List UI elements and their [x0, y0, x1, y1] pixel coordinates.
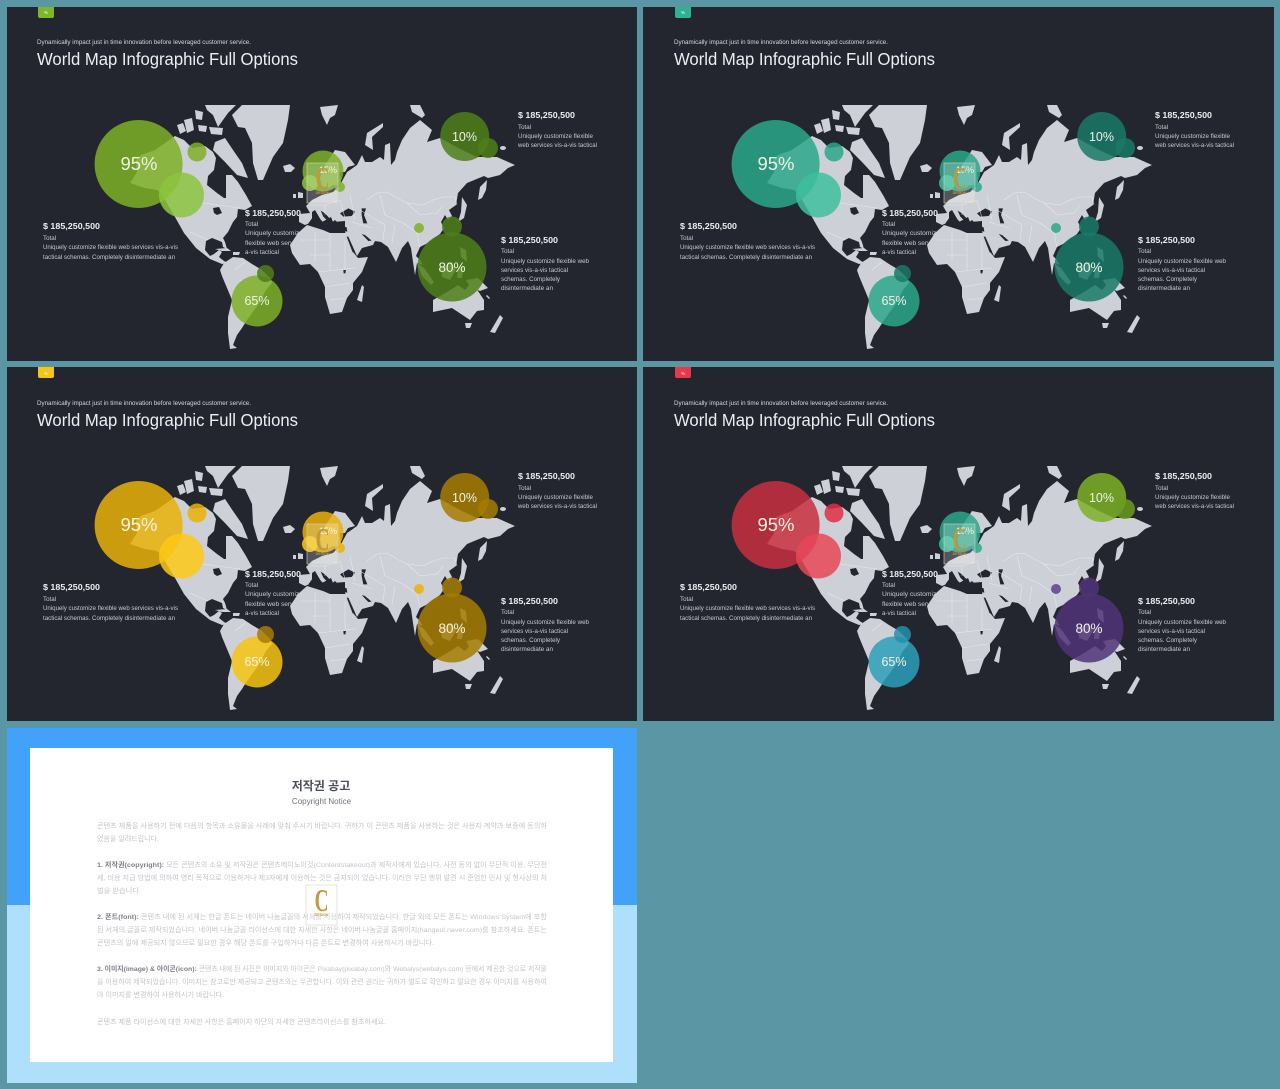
badge: % [44, 10, 48, 15]
text block: lower right: disintermediate an [501, 285, 554, 292]
percent labels: 15% [319, 526, 337, 536]
text block: left [43, 221, 178, 261]
text block: top right: Uniquely customize flexible [1155, 133, 1231, 140]
text block: lower right: $ 185,250,500 [501, 235, 558, 245]
text block: lower right: Total [501, 248, 514, 255]
badge [675, 367, 691, 378]
text block: lower right [1138, 596, 1227, 653]
text block: top right [1154, 471, 1234, 510]
notice body text: 야 이미지를 변경하여 사용하시기 바랍니다. [97, 990, 224, 999]
percent labels: 15% [319, 165, 337, 175]
text block: left: $ 185,250,500 [680, 221, 737, 231]
text block: top right [517, 471, 597, 510]
title: World Map Infographic Full Options [37, 410, 298, 430]
text block: centre: flexible web services vis- [245, 240, 317, 247]
panel: teal world map [643, 7, 1274, 361]
percent labels [120, 491, 477, 669]
data circles [95, 473, 498, 688]
text block: top right: web services vis-a-vis tactical [1154, 142, 1234, 149]
logo watermark [306, 882, 337, 925]
title: World Map Infographic Full Options [37, 49, 298, 69]
text block: centre: a-vis tactical [245, 249, 279, 256]
text block: left: Total [43, 235, 56, 242]
text block: left: Uniquely customize flexible web services vis-a-vis [680, 605, 815, 612]
panel: yellow world map [7, 367, 637, 721]
data circles [732, 473, 1135, 688]
subtitle: Dynamically impact just in time innovation before leveraged customer service. [37, 401, 251, 407]
panel: green world map [7, 7, 637, 361]
badge: % [681, 371, 685, 376]
text block: centre [245, 569, 317, 617]
text block: lower right: Total [501, 609, 514, 616]
percent labels: 95% [120, 153, 158, 174]
text block: lower right: Uniquely customize flexible web [1138, 258, 1227, 265]
text block: left: Uniquely customize flexible web services vis-a-vis [43, 244, 178, 251]
percent labels: 65% [881, 655, 907, 669]
text block: left [43, 582, 178, 622]
badge: % [681, 10, 685, 15]
world map [767, 466, 1152, 710]
data circles [732, 112, 1135, 326]
text block: left: Total [43, 596, 56, 603]
logo watermark: DESIGN [316, 191, 330, 195]
text block: top right: web services vis-a-vis tactical [517, 503, 597, 510]
notice heading: 저작권 공고 [292, 778, 350, 793]
text block: left: Total [680, 235, 693, 242]
text block: top right: Uniquely customize flexible [518, 494, 594, 501]
notice body text: 벌을 받습니다. [97, 886, 141, 895]
notice body text: 콘텐츠의 일에 제공되지 않으므로 필요한 경우 해당 폰트를 구입하거나 다른 폰트로 변경하여 사용하시기 바랍니다. [97, 938, 434, 947]
badge: % [44, 371, 48, 376]
notice body text: 콘텐츠 제품을 사용하기 전에 다음의 항목과 소유물을 사례에 맞춰 주시기 바랍니다. 귀하가 이 콘텐츠 제품을 사용하는 것은 사용자 계약과 보증에 동의하 [97, 821, 547, 830]
logo watermark: C [315, 882, 328, 918]
text block: lower right: schemas. Completely [501, 276, 561, 283]
panel: multicolour world map [643, 367, 1274, 721]
logo watermark: DESIGN [316, 552, 330, 556]
percent labels [757, 130, 1114, 308]
percent labels: 65% [244, 655, 270, 669]
text block: top right: web services vis-a-vis tactical [517, 142, 597, 149]
text block: top right: $ 185,250,500 [1155, 471, 1212, 481]
world map [130, 466, 515, 710]
world map [130, 105, 515, 349]
text block: centre: $ 185,250,500 [882, 569, 938, 579]
text block: lower right: Uniquely customize flexible web [501, 619, 590, 626]
text block: lower right: services vis-a-vis tactical [501, 267, 568, 274]
percent labels: 10% [1089, 130, 1114, 144]
text block: left: $ 185,250,500 [680, 582, 737, 592]
text block: centre: $ 185,250,500 [882, 208, 938, 218]
text block: lower right: Total [1138, 248, 1151, 255]
text block: lower right: disintermediate an [1138, 285, 1191, 292]
text block: centre [882, 208, 954, 256]
percent labels: 95% [120, 514, 158, 535]
text block: centre: a-vis tactical [882, 610, 916, 617]
text block: centre: $ 185,250,500 [245, 569, 301, 579]
notice body text [97, 821, 547, 1026]
percent labels: 80% [438, 621, 466, 636]
notice body text: 을 이용하여 제작되었습니다. 이미지는 참고로만 제공되고 콘텐츠와는 무관합니다. 이와 관련 권리는 귀하가 별도로 확인하고 필요한 경우 이미지를 사용하여 [97, 977, 547, 986]
text block: left: $ 185,250,500 [43, 221, 100, 231]
text block: centre: Total [245, 582, 258, 589]
panel: copyright notice [7, 728, 637, 1083]
text block: top right: Uniquely customize flexible [1155, 494, 1231, 501]
text block: centre: flexible web services vis- [245, 601, 317, 608]
background: upper blue band [7, 728, 637, 906]
text block: left [680, 582, 815, 622]
subtitle: Dynamically impact just in time innovation before leveraged customer service. [674, 40, 888, 46]
text block: centre: Uniquely customize [882, 230, 941, 237]
text block: lower right: Uniquely customize flexible web [501, 258, 590, 265]
notice body text: 콘텐츠 제품 라이선스에 대한 자세한 사항은 홈페이지 하단의 자세한 콘텐츠라이선스를 참조하세요. [97, 1017, 386, 1026]
subtitle: Dynamically impact just in time innovation before leveraged customer service. [37, 40, 251, 46]
logo watermark: C [316, 521, 329, 557]
text block: top right: $ 185,250,500 [518, 471, 575, 481]
percent labels: 65% [244, 294, 270, 308]
notice body text: 된 서체의 글꼴로 제작되었습니다. 네이버 나눔글꼴 라이선스에 대한 자세한 사항은 네이버 나눔글꼴 홈페이지(hangeul.naver.com)를 참조하세요. 폰트는 [97, 925, 547, 934]
badge [38, 7, 54, 18]
text block: left: tactical schemas. Completely disintermediate an [680, 254, 813, 261]
text block: lower right: Total [1138, 609, 1151, 616]
text block: centre: Uniquely customize [245, 230, 304, 237]
text block: lower right: Uniquely customize flexible web [1138, 619, 1227, 626]
text block: lower right: $ 185,250,500 [501, 596, 558, 606]
logo watermark [307, 160, 338, 203]
text block: left: Total [680, 596, 693, 603]
text block: top right: Total [1155, 485, 1168, 492]
text block: lower right: $ 185,250,500 [1138, 235, 1195, 245]
percent labels: 10% [452, 130, 477, 144]
text block: lower right: $ 185,250,500 [1138, 596, 1195, 606]
text block: lower right: disintermediate an [501, 646, 554, 653]
text block: top right: web services vis-a-vis tactical [1154, 503, 1234, 510]
text block: centre: Total [882, 221, 895, 228]
text block: top right: $ 185,250,500 [518, 110, 575, 120]
percent labels: 15% [956, 165, 974, 175]
percent labels [120, 130, 477, 308]
text block: lower right [501, 596, 590, 653]
percent labels [757, 491, 1114, 669]
text block: top right: Total [1155, 124, 1168, 131]
text block: lower right: schemas. Completely [501, 637, 561, 644]
percent labels: 80% [438, 260, 466, 275]
text block: left: tactical schemas. Completely disintermediate an [43, 615, 176, 622]
percent labels: 95% [757, 153, 795, 174]
text block: lower right: services vis-a-vis tactical [1138, 267, 1205, 274]
text block: lower right: services vis-a-vis tactical [501, 628, 568, 635]
percent labels: 80% [1075, 260, 1103, 275]
text block: top right: Total [518, 485, 531, 492]
text block: centre: $ 185,250,500 [245, 208, 301, 218]
text block: lower right: disintermediate an [1138, 646, 1191, 653]
percent labels: 15% [956, 526, 974, 536]
title: World Map Infographic Full Options [674, 49, 935, 69]
logo watermark: DESIGN [953, 552, 967, 556]
white card [30, 748, 613, 1062]
subtitle: Dynamically impact just in time innovation before leveraged customer service. [674, 401, 888, 407]
logo watermark: C [953, 521, 966, 557]
text block: left: $ 185,250,500 [43, 582, 100, 592]
text block: left: tactical schemas. Completely disintermediate an [43, 254, 176, 261]
text block: centre: a-vis tactical [882, 249, 916, 256]
data circles [95, 112, 498, 326]
notice body text: 3. 이미지(image) & 아이콘(icon): 콘텐츠 내에 된 사진은 이미지와 아이콘은 Pixabay(pixabay.com)와 Webalys(webalys.com) 등에서 제공한 것으로 저작물 [97, 964, 547, 973]
background: lower light blue band [7, 905, 637, 1083]
text block: centre: flexible web services vis- [882, 240, 954, 247]
percent labels: 10% [452, 491, 477, 505]
text block: centre: flexible web services vis- [882, 601, 954, 608]
text block: top right: $ 185,250,500 [1155, 110, 1212, 120]
text block: lower right: schemas. Completely [1138, 637, 1198, 644]
notice body text: 세, 비용 지급 방법에 의하여 영리 목적으로 이용하거나 제3자에게 이용하는 것은 금지되어 있습니다. 이러한 무단 행위 발견 시 준엄한 민사 및 형사상의 처 [97, 873, 547, 882]
notice body text: 1. 저작권(copyright): 모든 콘텐츠의 소유 및 저작권은 콘텐츠메이노이것(Contentstakeout)과 제작사에게 있습니다. 사전 동의 없이 무단적 이용, 무단전 [97, 860, 547, 869]
logo watermark: C [953, 160, 966, 196]
logo watermark [307, 521, 338, 564]
text block: left [680, 221, 815, 261]
text block: centre [882, 569, 954, 617]
text block: lower right: schemas. Completely [1138, 276, 1198, 283]
logo watermark: C [316, 160, 329, 196]
badge [38, 367, 54, 378]
percent labels: 65% [881, 294, 907, 308]
text block: top right [517, 110, 597, 149]
logo watermark: DESIGN [953, 191, 967, 195]
percent labels: 10% [1089, 491, 1114, 505]
logo watermark: DESIGN [315, 913, 329, 917]
text block: top right [1154, 110, 1234, 149]
notice body text: 였음을 알려드립니다. [97, 834, 159, 843]
title: World Map Infographic Full Options [674, 410, 935, 430]
notice subheading: Copyright Notice [292, 797, 352, 806]
text block: centre [245, 208, 317, 256]
text block: lower right: services vis-a-vis tactical [1138, 628, 1205, 635]
world map [767, 105, 1152, 349]
badge [675, 7, 691, 18]
text block: centre: Uniquely customize [245, 591, 304, 598]
text block: left: Uniquely customize flexible web services vis-a-vis [680, 244, 815, 251]
text block: left: tactical schemas. Completely disintermediate an [680, 615, 813, 622]
text block: centre: Uniquely customize [882, 591, 941, 598]
percent labels: 95% [757, 514, 795, 535]
text block: centre: Total [882, 582, 895, 589]
text block: top right: Uniquely customize flexible [518, 133, 594, 140]
text block: lower right [1138, 235, 1227, 292]
notice body text: 2. 폰트(font): 콘텐츠 내에 된 서체는 한글 폰트는 네이버 나눔글꼴의 서체를 사용하여 제작되었습니다. 한글 외의 모든 폰트는 Windows System에 포함 [97, 912, 547, 921]
text block: top right: Total [518, 124, 531, 131]
text block: centre: Total [245, 221, 258, 228]
percent labels: 80% [1075, 621, 1103, 636]
text block: lower right [501, 235, 590, 292]
text block: left: Uniquely customize flexible web services vis-a-vis [43, 605, 178, 612]
text block: centre: a-vis tactical [245, 610, 279, 617]
logo watermark [944, 521, 975, 564]
logo watermark [944, 160, 975, 203]
